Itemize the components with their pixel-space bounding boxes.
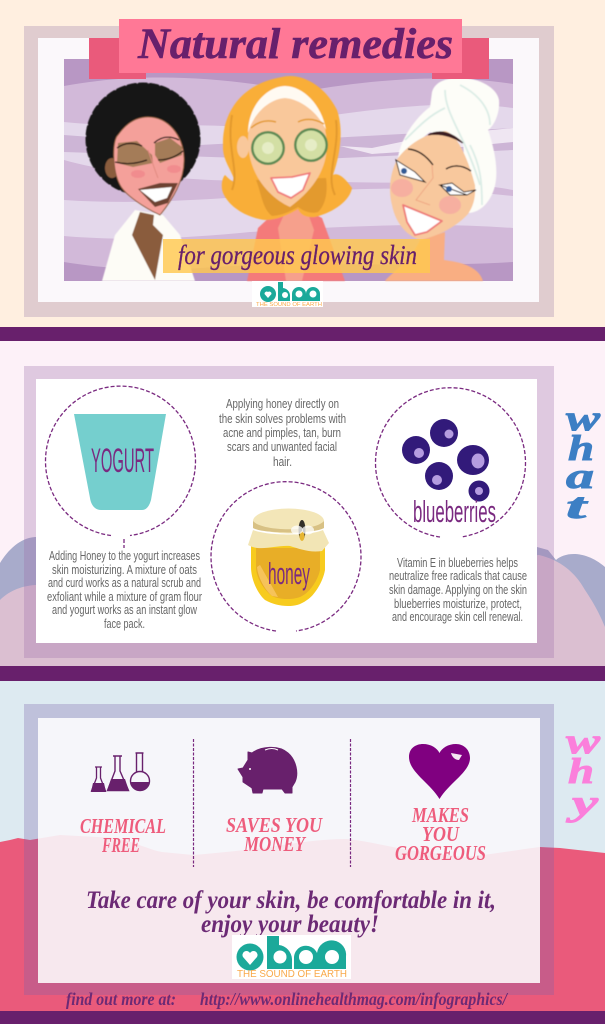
text: vitamin E: skin damage. Applying on the skin — [389, 582, 527, 597]
icon: piggy bank — [238, 747, 297, 793]
tagline — [86, 887, 496, 938]
text: vitamin E: neutralize free radicals that cause — [389, 568, 527, 583]
icon: flasks — [91, 753, 150, 792]
label: makes you gorgeous: YOU — [422, 822, 461, 846]
label: makes you gorgeous: MAKES — [411, 803, 469, 827]
honey circle and jar: honey — [268, 556, 310, 591]
panel: why — [24, 704, 554, 995]
label: chemical free: FREE — [101, 833, 140, 857]
text: honey with yogurt: and curd works as a natural scrub and — [48, 575, 201, 590]
logo: ohm small: THE SOUND OF EARTH — [256, 302, 322, 308]
title banner — [89, 19, 489, 79]
yogurt circle and cup — [46, 386, 195, 548]
side label: why — [565, 721, 601, 823]
title: Natural remedies — [137, 21, 453, 68]
label: chemical free: CHEMICAL — [80, 814, 166, 838]
illustration: woman with towel — [385, 78, 499, 281]
footer text: http://www.onlinehealthmag.com/infographics/ — [200, 989, 509, 1009]
icon: heart — [409, 744, 470, 799]
text: honey directly — [219, 396, 346, 469]
logo: ohm large: THE SOUND OF EARTH — [237, 969, 347, 980]
text: honey with yogurt — [47, 548, 202, 631]
logo: ohm large — [232, 935, 351, 980]
label: chemical free — [80, 814, 166, 857]
text: honey directly: hair. — [273, 454, 292, 469]
text: honey with yogurt: exfoliant while a mixture of gram flour — [47, 589, 202, 604]
side label: why: w — [566, 721, 601, 761]
tagline: enjoy your beauty! — [201, 911, 379, 938]
honey circle and jar — [211, 482, 361, 631]
footer text: find out more at: — [66, 989, 176, 1009]
text: honey directly: Applying honey directly on — [226, 396, 339, 411]
text: honey with yogurt: Adding Honey to the yogurt increases — [49, 548, 200, 563]
text: vitamin E — [389, 555, 527, 624]
text: honey directly: scars and unwanted facial — [227, 439, 337, 454]
text: vitamin E: blueberries moisturize, protect, — [394, 596, 522, 611]
text: honey with yogurt: skin moisturizing. A mixture of oats — [52, 562, 197, 577]
text: honey with yogurt: and yogurt works as an instant glow — [52, 602, 197, 617]
panel: hero frame — [24, 26, 554, 317]
panel: what — [24, 366, 554, 658]
yogurt circle and cup: YOGURT — [91, 442, 154, 480]
side label: what — [566, 398, 601, 526]
text: honey directly: the skin solves problems with — [219, 411, 346, 426]
text: honey directly: acne and pimples, tan, burn — [223, 425, 341, 440]
text: vitamin E: Vitamin E in blueberries helps — [397, 555, 518, 570]
illustration: blonde woman with cucumbers — [222, 76, 352, 281]
subtitle strip: for gorgeous glowing skin — [178, 240, 417, 270]
text: honey with yogurt: face pack. — [104, 616, 145, 631]
side label: what: h — [568, 428, 594, 468]
side label: what: t — [566, 486, 588, 526]
tagline: Take care of your skin, be comfortable in it, — [86, 887, 496, 914]
side label: why: y — [565, 783, 600, 823]
label: saves you money — [226, 813, 324, 856]
blueberries circle: blueberries — [413, 494, 496, 529]
illustration: woman with dark hair and clay mask — [88, 85, 198, 281]
footer text — [66, 989, 509, 1009]
label: saves you money: MONEY — [243, 832, 307, 856]
side label: what: a — [566, 456, 594, 496]
label: saves you money: SAVES YOU — [226, 813, 324, 837]
logo: ohm small — [252, 281, 323, 308]
label: makes you gorgeous: GORGEOUS — [395, 841, 486, 865]
side label: what: w — [566, 398, 601, 438]
text: vitamin E: and encourage skin cell renewal. — [392, 609, 523, 624]
illustration: lavender wavy background — [64, 59, 513, 281]
blueberries circle — [376, 388, 526, 537]
label: makes you gorgeous — [395, 803, 486, 865]
side label: why: h — [568, 751, 594, 791]
